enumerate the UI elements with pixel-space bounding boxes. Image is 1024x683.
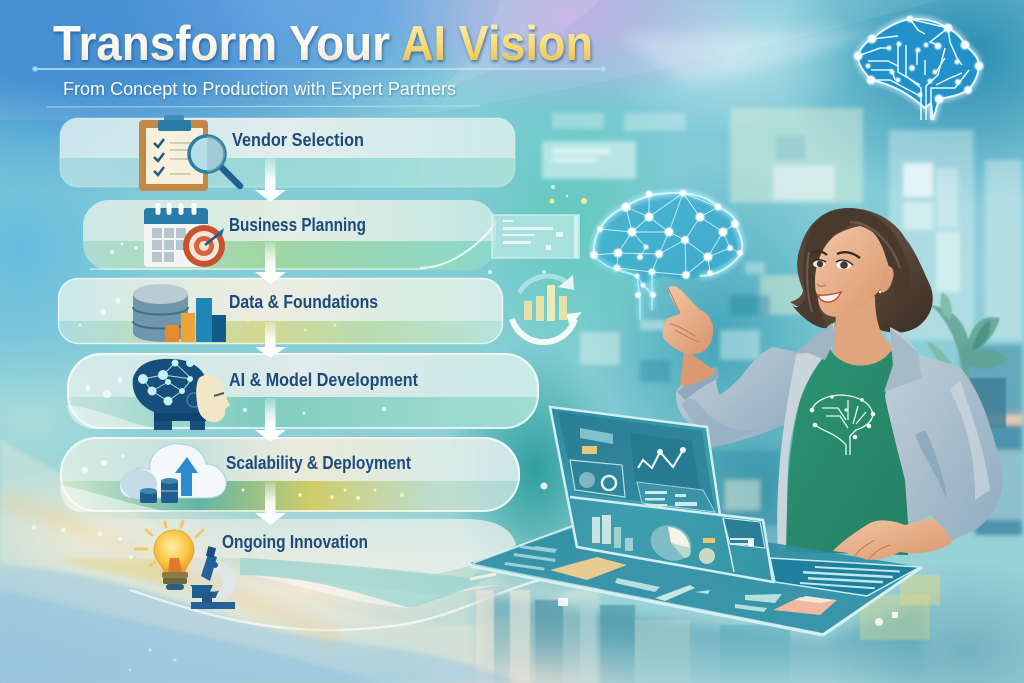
under-desk reflections (476, 575, 940, 683)
panel: data and foundations (58, 278, 503, 344)
woman: neck and chest (834, 296, 892, 369)
office windows (542, 108, 1022, 535)
woman: resting hand (833, 518, 952, 560)
dashboard screen (550, 407, 773, 582)
screen: pie chart (645, 519, 715, 567)
label: ongoing innovation: Ongoing Innovation (222, 531, 368, 552)
desk: tan paper (550, 557, 627, 580)
label: scalability and deployment: Scalability & Deployment (226, 452, 411, 473)
desk: keyboard (770, 558, 920, 596)
arrow: model to scalability (255, 398, 286, 442)
panel: scalability and deployment (60, 437, 520, 512)
screen: bar chart (592, 515, 633, 551)
label: vendor selection: Vendor Selection (232, 129, 364, 150)
label: data and foundations: Data & Foundations (229, 291, 378, 312)
icon: glowing network brain (590, 190, 743, 320)
woman: raised arm sleeve (676, 347, 798, 447)
step labels (222, 129, 418, 552)
label: ai and model development: AI & Model Development (229, 369, 418, 390)
panel: business planning (83, 200, 496, 270)
screen: line chart (630, 433, 700, 490)
icon: calendar and target (144, 203, 225, 267)
woman (663, 208, 1003, 555)
woman: hair back (790, 208, 933, 333)
title: Transform Your (53, 17, 390, 71)
desk: left papers (505, 545, 557, 571)
icon: database and bars (133, 284, 226, 342)
woman: eyes and mouth (812, 251, 881, 302)
screen: side panel (723, 518, 765, 572)
t-shirt brain logo (810, 395, 875, 455)
panel: vendor selection (60, 118, 515, 187)
label: business planning: Business Planning (229, 214, 366, 235)
arrow: scalability to innovation (255, 482, 286, 525)
screen: text rows (637, 482, 715, 512)
icon: chart with refresh arrows (512, 275, 582, 342)
screen: top widgets (570, 428, 625, 497)
card: floating document (492, 215, 579, 258)
desk (470, 525, 940, 683)
icon: cloud upload (120, 444, 226, 503)
title divider (32, 66, 606, 72)
icon: ai head (133, 359, 230, 430)
title: AI Vision (401, 17, 593, 71)
arrow: data to model (255, 322, 286, 358)
glass highlights (540, 482, 898, 626)
woman: right jacket (885, 327, 1003, 541)
icon: clipboard and magnifier (139, 115, 240, 191)
subtitle: From Concept to Production with Expert Partners (63, 79, 456, 99)
desk: card (773, 597, 837, 615)
woman: face (812, 226, 892, 317)
woman: hair front (790, 208, 910, 328)
panel: ongoing innovation (60, 519, 516, 608)
woman: ear (880, 266, 894, 292)
title (53, 17, 593, 71)
arrow: vendor to business (255, 158, 286, 202)
top swoosh (0, 0, 940, 122)
woman: t-shirt (785, 345, 910, 555)
panel: ai and model development (67, 353, 539, 429)
icon: circuit brain logo (854, 16, 984, 120)
woman: left jacket front (777, 322, 835, 550)
sparkles (32, 185, 587, 671)
bottom waves (0, 440, 600, 683)
woman: pointing hand (663, 286, 716, 386)
desk: small widgets (615, 578, 782, 612)
icon: light bulb and microscope (136, 521, 236, 609)
arrow: business to data (255, 242, 286, 284)
plant (927, 292, 1008, 428)
